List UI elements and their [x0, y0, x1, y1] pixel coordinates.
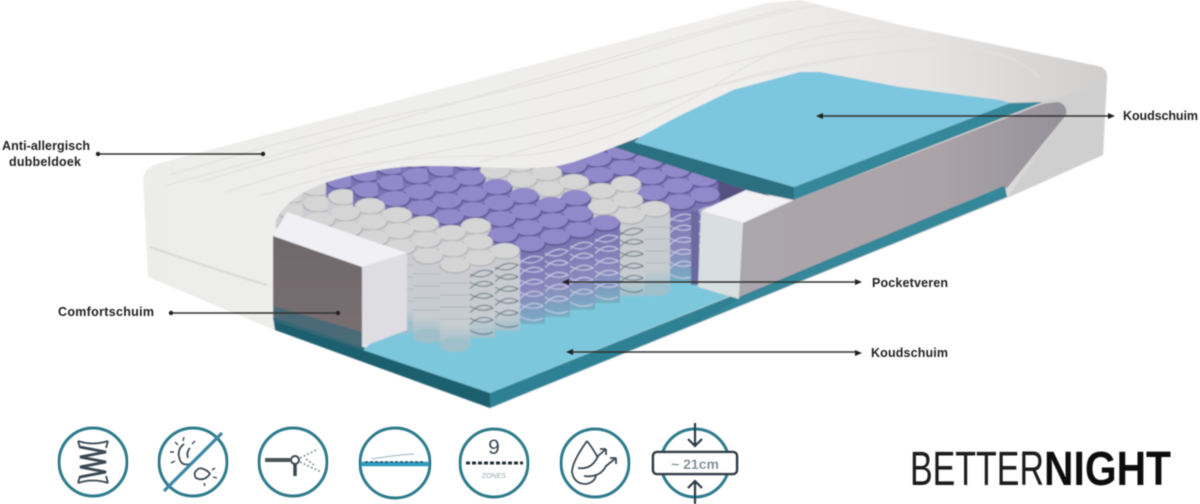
icon: 9 zones [460, 429, 528, 497]
icon: water drop and ventilation arrows [561, 429, 629, 497]
icon: zipper [259, 428, 327, 496]
label: Anti-allergisch dubbeldoek: dubbeldoek [9, 155, 81, 169]
logo: BetterNight: BETTER [910, 443, 1044, 496]
right comfort foam block [691, 102, 1066, 322]
cover quilting texture [358, 21, 834, 164]
cover right end face [1007, 76, 1107, 198]
mattress cover: anti-allergic quilted fabric [143, 0, 1107, 408]
icon: mattress height 21cm [653, 423, 737, 504]
label: Koudschuim top: Koudschuim [1123, 109, 1198, 123]
icon: 9 zones: ZONES [482, 473, 506, 480]
mattress [143, 0, 1107, 408]
base foam layer: koudschuim [273, 186, 1007, 408]
label: Pocketveren: Pocketveren [872, 276, 948, 290]
left comfort foam block [273, 212, 407, 350]
icon: 9 zones: 9 [488, 436, 500, 459]
icon: anti-allergic bacteria crossed out [159, 428, 227, 496]
label: Anti-allergisch dubbeldoek [2, 139, 265, 169]
label: Koudschuim top [816, 109, 1198, 123]
icon: pocket spring [59, 428, 127, 496]
icon: mattress layer [360, 428, 430, 498]
label: Comfortschuim [58, 305, 340, 319]
icon: mattress height 21cm: ~ 21cm [671, 456, 719, 472]
upper foam layer: koudschuim [614, 72, 1043, 200]
pocket springs [276, 142, 720, 352]
label: Comfortschuim: Comfortschuim [58, 305, 154, 319]
label: Koudschuim bottom [566, 346, 948, 360]
label: Anti-allergisch dubbeldoek: Anti-allergisch [2, 139, 90, 153]
label: Pocketveren [562, 276, 948, 290]
logo: BetterNight: NIGHT [1044, 443, 1171, 496]
pocket spring gaps [602, 136, 770, 202]
label: Koudschuim bottom: Koudschuim [871, 346, 948, 360]
cover side seam [150, 247, 267, 285]
